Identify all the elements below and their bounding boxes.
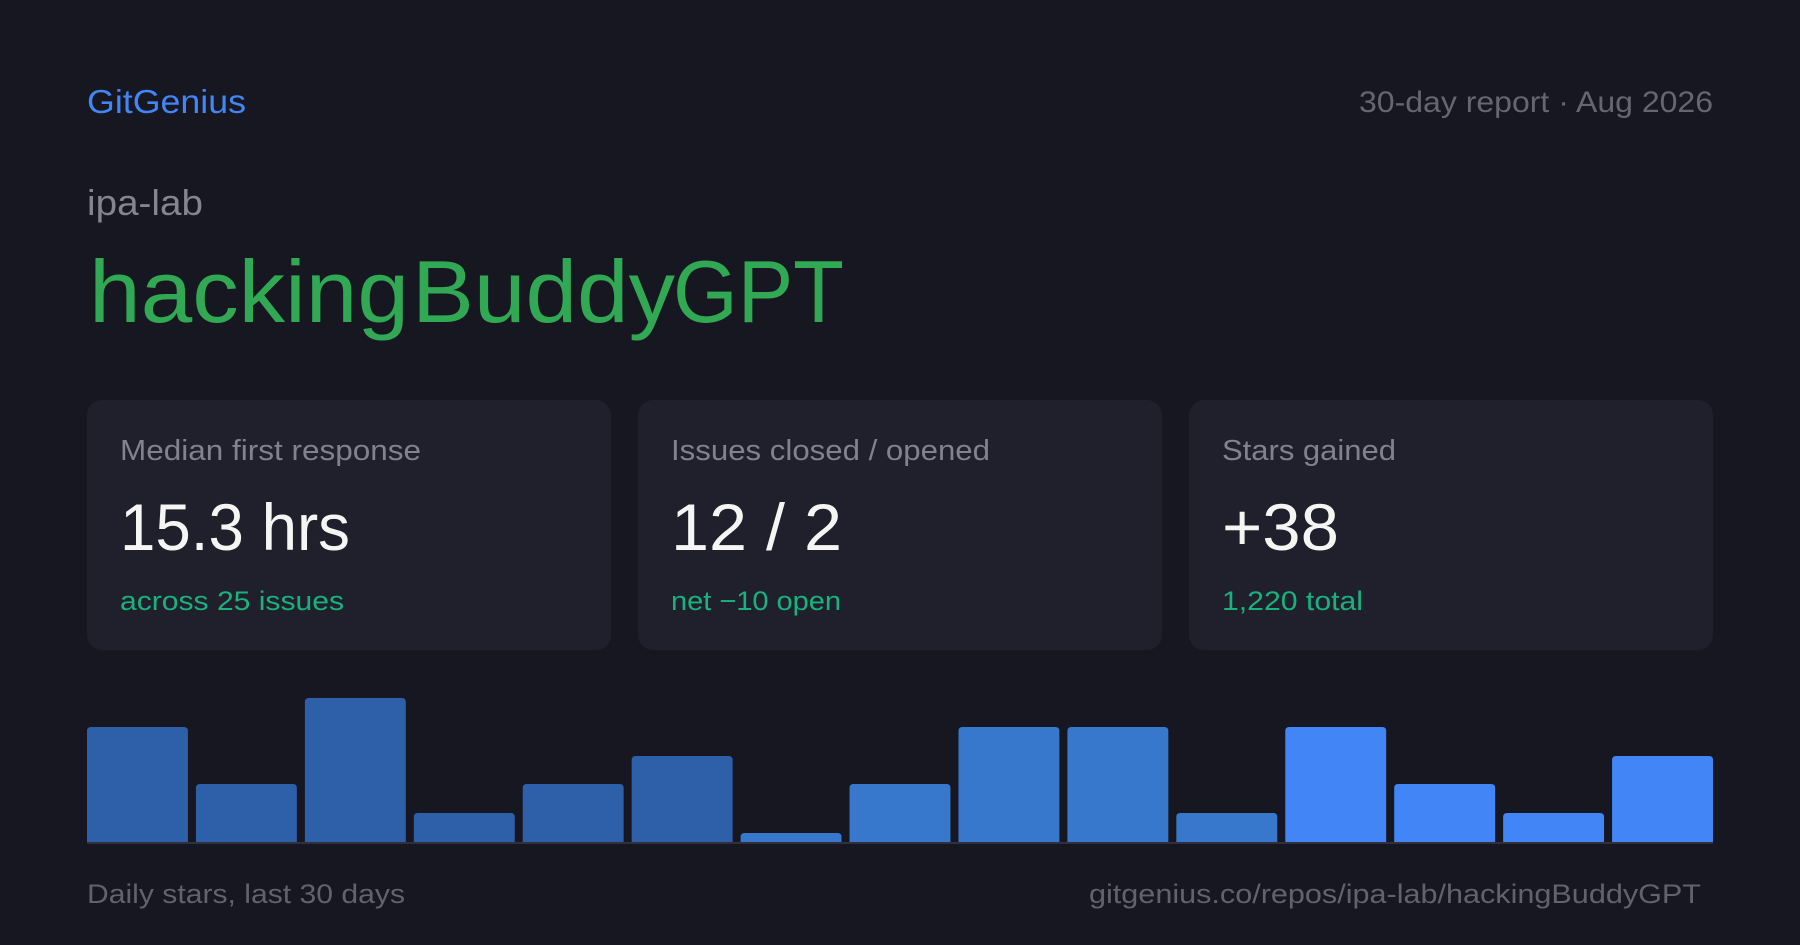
repository URL: gitgenius.co/repos/ipa-lab/hackingBuddyGPT	[1089, 879, 1701, 909]
report period: 30-day report · Aug 2026	[1359, 86, 1713, 119]
label: median first response: Median first response	[120, 435, 421, 467]
bars: first group	[87, 698, 733, 842]
chart caption: Daily stars, last 30 days	[87, 879, 405, 909]
repository owner: ipa-lab	[87, 182, 203, 223]
note: total stars: 1,220 total	[1222, 586, 1363, 616]
brand name: GitGenius	[87, 83, 246, 120]
bars: third group	[1285, 727, 1713, 842]
repository title: hacking	[89, 242, 409, 341]
panel: median first response	[87, 400, 611, 650]
value: 15.3 hrs: 15.3 hrs	[120, 490, 350, 564]
label: issues closed and opened: Issues closed / opened	[671, 435, 990, 467]
note: net change in open issues: net −10 open	[671, 586, 841, 616]
value: 12 / 2: 12 / 2	[671, 490, 842, 564]
value: +38: +38	[1222, 490, 1339, 564]
repository title: Buddy	[412, 242, 675, 341]
panel: stars gained	[1189, 400, 1713, 650]
repository title: GPT	[673, 242, 844, 341]
label: stars gained: Stars gained	[1222, 435, 1396, 467]
bars: second group	[741, 727, 1277, 842]
panel: issues closed and opened	[638, 400, 1162, 650]
note: across 25 issues: across 25 issues	[120, 586, 344, 616]
repository title	[89, 242, 844, 341]
chart baseline	[87, 842, 1713, 844]
bar chart: daily stars	[87, 698, 1713, 844]
